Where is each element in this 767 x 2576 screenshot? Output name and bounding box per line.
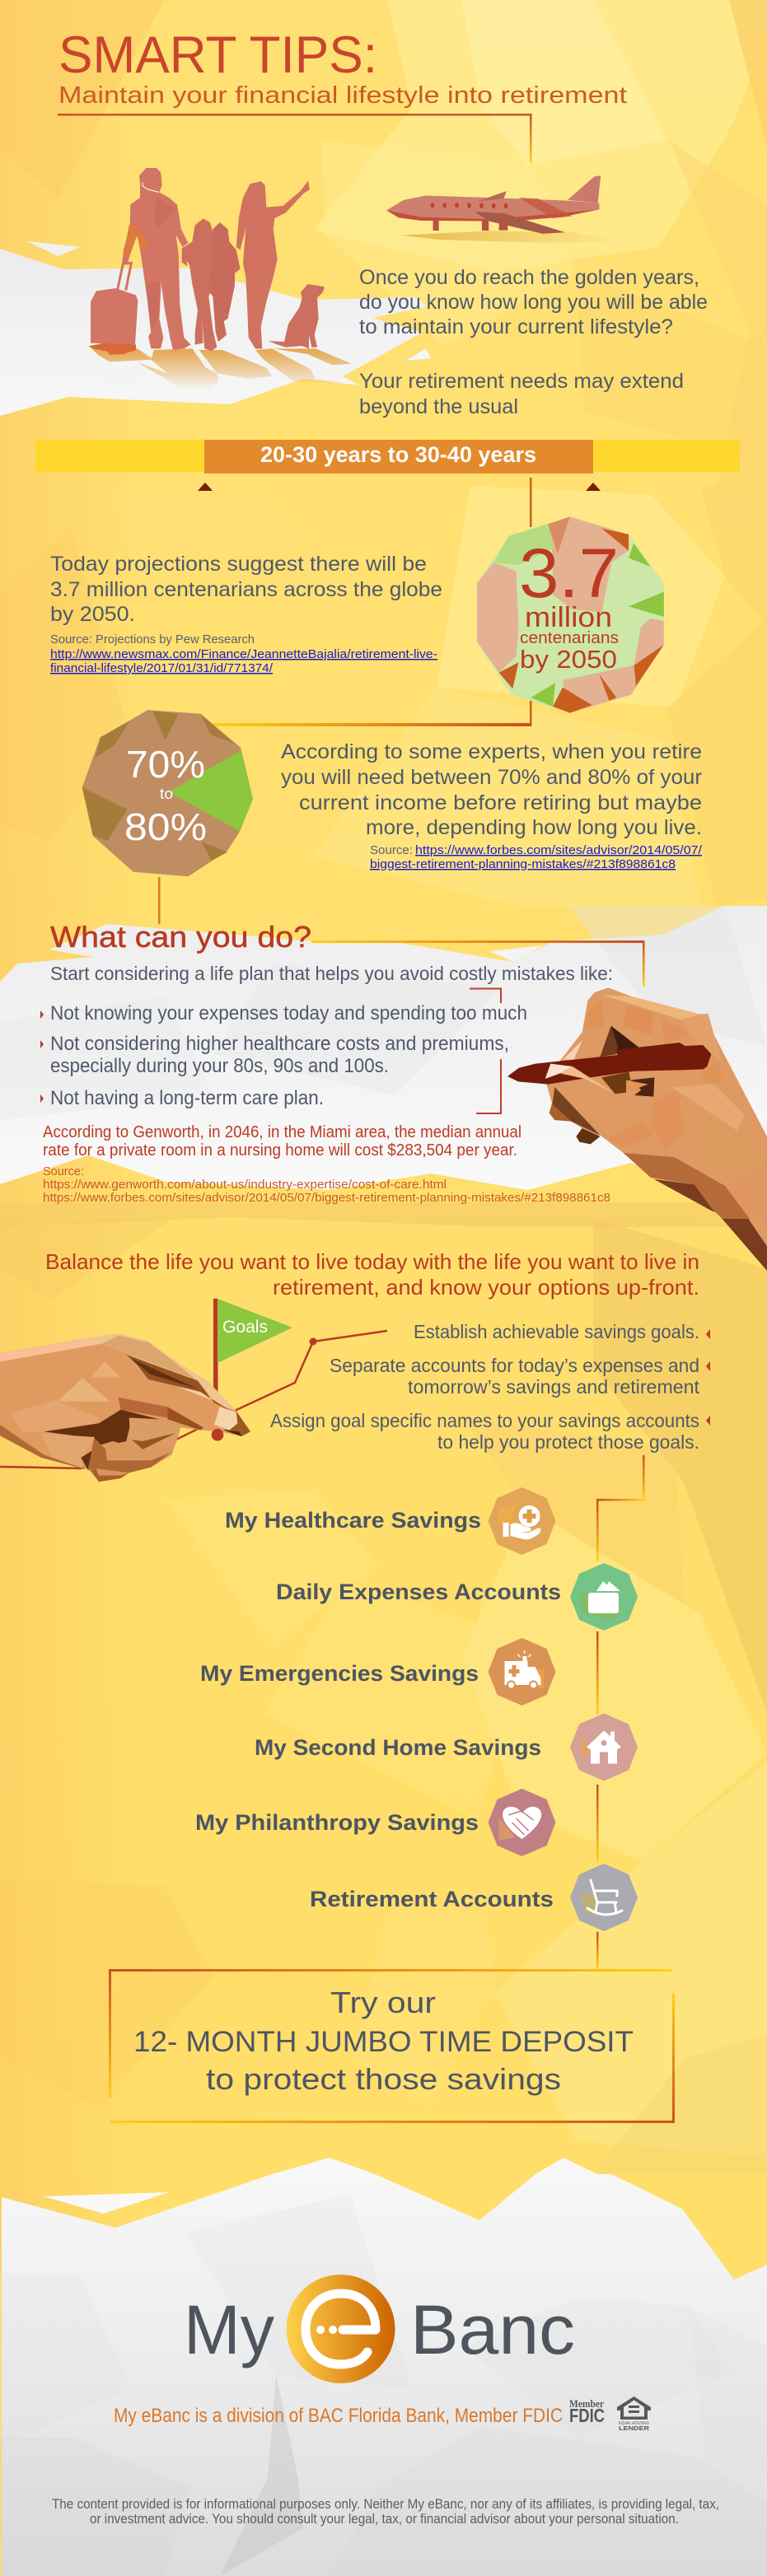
source: Genworth and Forbes: [43, 1164, 610, 1205]
logo: FDIC member: Member: [569, 2397, 604, 2410]
list: costly mistakes: Not having a long-term care plan.: [50, 1087, 324, 1109]
text block: golden years question: Your retirement needs may extend: [359, 370, 684, 393]
text block: centenarian projection: Today projections suggest there will be: [50, 553, 427, 576]
illustration: family silhouette with luggage and dog: [88, 168, 352, 391]
intro text: life plan: Start considering a life plan that helps you avoid costly mistakes like:: [50, 963, 613, 984]
marker: right triangle: [586, 483, 601, 491]
connector: tips to accounts: [596, 1455, 644, 1970]
logo: equal housing lender: [617, 2396, 651, 2432]
knuckle shadows: [600, 1026, 654, 1097]
text block: golden years question: beyond the usual: [359, 395, 518, 418]
text block: centenarian projection: by 2050.: [50, 603, 135, 626]
illustration: airplane: [386, 175, 626, 243]
landing gear: [433, 219, 507, 231]
connector: band to badges: [213, 478, 532, 726]
source: Forbes: biggest-retirement-planning-mistakes/#213f898861c8: [370, 857, 676, 871]
logo: My eBanc: [184, 2275, 575, 2383]
account: retirement: Retirement Accounts: [310, 1887, 554, 1911]
account: daily expenses: Daily Expenses Accounts: [276, 1580, 561, 1604]
connector: heading to hand: [311, 940, 644, 987]
disclaimer: or investment advice. You should consult your legal, tax, or financial advisor about your personal situation.: [90, 2511, 679, 2527]
source: Forbes: https://www.forbes.com/sites/advisor/2014/05/07/: [415, 843, 703, 857]
marker: left triangle: [198, 483, 213, 491]
list: goal tips: [270, 1321, 710, 1453]
account: emergencies: My Emergencies Savings: [200, 1661, 479, 1686]
bracket: bottom: [476, 1059, 501, 1113]
boy: [208, 222, 241, 342]
heading: balance the life: [45, 1249, 699, 1300]
bullet: [40, 1010, 44, 1019]
account: retirement: [310, 1864, 638, 1931]
text block: 70 to 80 percent income: [281, 740, 702, 839]
icon: house: [570, 1713, 638, 1780]
shadows on ground: [88, 346, 352, 391]
logo: My eBanc: My: [184, 2291, 274, 2368]
timeline band: 20-30 years to 30-40 years: 20-30 years to 30-40 years: [260, 442, 536, 467]
bullet: [706, 1416, 710, 1426]
heading: balance the life: Balance the life you want to live today with the life you want to live in: [45, 1249, 699, 1274]
list: goal tips: Separate accounts for today’s expenses and: [330, 1355, 699, 1376]
red dot: [212, 1429, 223, 1441]
text block: golden years question: [359, 266, 708, 418]
text block: centenarian projection: 3.7 million centenarians across the globe: [50, 578, 442, 601]
pen: [507, 1043, 711, 1085]
logo: FDIC member: FDIC: [569, 2405, 605, 2426]
text block: 70 to 80 percent income: current income before retiring but maybe: [299, 791, 702, 814]
source: Genworth and Forbes: Source:: [43, 1164, 84, 1178]
text block: golden years question: do you know how long you will be able: [359, 291, 708, 314]
suitcase: [89, 263, 138, 355]
badge: 70% to 80%: [82, 710, 253, 876]
callout: Genworth cost: rate for a private room in a nursing home will cost $283,504 per year.: [43, 1141, 517, 1160]
bullet: [40, 1040, 44, 1048]
source: Forbes: Source:: [370, 843, 413, 857]
heading: what can you do: What can you do?: [50, 920, 311, 954]
icon: rocking chair: [570, 1864, 638, 1931]
background: white facets behind family: [0, 241, 431, 416]
account: second home: [255, 1713, 638, 1780]
mother pointing: [236, 180, 310, 348]
text block: golden years question: to maintain your current lifestyle?: [359, 315, 673, 338]
source: Pew Research: http://www.newsmax.com/Finance/JeannetteBajalia/retirement-live-: [50, 647, 437, 661]
background: white facets behind what can you do: [0, 906, 767, 1219]
badge: 70% to 80%: 80%: [124, 805, 207, 848]
icon: wallet: [570, 1563, 638, 1631]
father: [122, 168, 191, 350]
source: Pew Research: financial-lifestyle/2017/01/31/id/771374/: [50, 661, 274, 675]
account: healthcare savings: [225, 1487, 555, 1555]
callout: Genworth cost: According to Genworth, in 2046, in the Miami area, the median annual: [43, 1123, 521, 1141]
callout box: 12-month jumbo time deposit: 12- MONTH JUMBO TIME DEPOSIT: [133, 2026, 634, 2058]
list: goal tips: Assign goal specific names to your savings accounts: [270, 1410, 699, 1431]
source: Pew Research: Source: Projections by Pew Research: [50, 632, 255, 646]
bullet: [40, 1094, 44, 1103]
list: costly mistakes: especially during your 80s, 90s and 100s.: [50, 1055, 389, 1077]
badge: 70% to 80%: 70%: [126, 743, 205, 786]
account: philanthropy: [195, 1789, 555, 1856]
badge: 3.7 million centenarians by 2050: by 2050: [520, 645, 617, 674]
account: emergencies: [200, 1638, 555, 1706]
icon: hand holding medical cross: [488, 1487, 555, 1555]
text block: 70 to 80 percent income: you will need between 70% and 80% of your: [281, 766, 702, 789]
source: Forbes: [370, 843, 703, 871]
heading: balance the life: retirement, and know your options up-front.: [273, 1275, 699, 1300]
badge: 3.7 million centenarians by 2050: 3.7: [519, 534, 619, 612]
dog: [269, 284, 325, 348]
illustration: hand placing goal flag: [0, 1333, 250, 1482]
bullet: [706, 1329, 710, 1339]
disclaimer: [52, 2496, 719, 2527]
badge: 3.7 million centenarians by 2050: million: [525, 602, 612, 633]
title: SMART TIPS:: [58, 26, 377, 84]
plane shadow: [401, 231, 626, 243]
finger highlights: [545, 1040, 615, 1094]
illustration: hand holding pen: [507, 987, 767, 1271]
account: philanthropy: My Philanthropy Savings: [195, 1810, 479, 1835]
subtitle: Maintain your financial lifestyle into retirement: [58, 82, 627, 109]
callout box: 12-month jumbo time deposit: [109, 1969, 675, 2123]
icon: heart with handshake: [488, 1789, 555, 1856]
account: healthcare savings: My Healthcare Savings: [225, 1508, 481, 1533]
callout box: 12-month jumbo time deposit: Try our: [330, 1986, 436, 2019]
background: grey facets behind logo: [0, 2158, 767, 2576]
badge: 3.7 million centenarians by 2050: centenarians: [520, 629, 619, 647]
text block: 70 to 80 percent income: more, depending how long you live.: [366, 816, 702, 839]
connector: title rule to plane: [58, 114, 532, 163]
bullet: [706, 1361, 710, 1371]
windows: [431, 203, 507, 208]
list: costly mistakes: Not knowing your expenses today and spending too much: [50, 1002, 527, 1024]
chart line: progress to goals: [0, 1331, 387, 1468]
account: second home: My Second Home Savings: [255, 1735, 541, 1760]
callout: Genworth cost: [43, 1123, 521, 1160]
girl: [182, 218, 217, 351]
list: goal tips: tomorrow’s savings and retirement: [408, 1376, 700, 1398]
list: goal tips: to help you protect those goals.: [437, 1431, 699, 1453]
badge: 3.7 million centenarians by 2050: [477, 516, 664, 713]
badge: 70% to 80%: to: [160, 786, 173, 802]
callout box: 12-month jumbo time deposit: to protect those savings: [206, 2062, 561, 2096]
lower hand shading: [550, 1087, 767, 1271]
tagline: My eBanc is a division of BAC Florida Bank, Member FDIC: [114, 2405, 563, 2427]
timeline band: 20-30 years to 30-40 years: [35, 440, 740, 474]
list: goal tips: Establish achievable savings goals.: [414, 1321, 699, 1342]
flag: goals: [213, 1299, 292, 1402]
source: Genworth and Forbes: https://www.genworth.com/about-us/industry-expertise/cost-of-care.html: [43, 1178, 447, 1192]
list: costly mistakes: Not considering higher healthcare costs and premiums,: [50, 1033, 509, 1055]
source: Pew Research: [50, 632, 437, 675]
account: daily expenses: [276, 1563, 638, 1631]
bracket: top: [470, 988, 501, 1003]
logo: My eBanc: Banc: [410, 2291, 575, 2368]
flag: goals: Goals: [222, 1318, 268, 1337]
logo: FDIC member: [569, 2397, 605, 2426]
icon: ambulance: [488, 1638, 555, 1706]
connector: badge to what can you do: [158, 877, 160, 924]
logo: equal housing lender: EQUAL HOUSING: [619, 2421, 649, 2426]
text block: centenarian projection: [50, 553, 442, 626]
source: Genworth and Forbes: https://www.forbes.com/sites/advisor/2014/05/07/biggest-retirement-planning-mistakes/#213f898861c8: [43, 1191, 610, 1205]
list: costly mistakes: [40, 1002, 527, 1109]
logo: equal housing lender: LENDER: [619, 2424, 650, 2432]
text block: golden years question: Once you do reach the golden years,: [359, 266, 699, 289]
text block: 70 to 80 percent income: According to some experts, when you retire: [281, 740, 702, 763]
